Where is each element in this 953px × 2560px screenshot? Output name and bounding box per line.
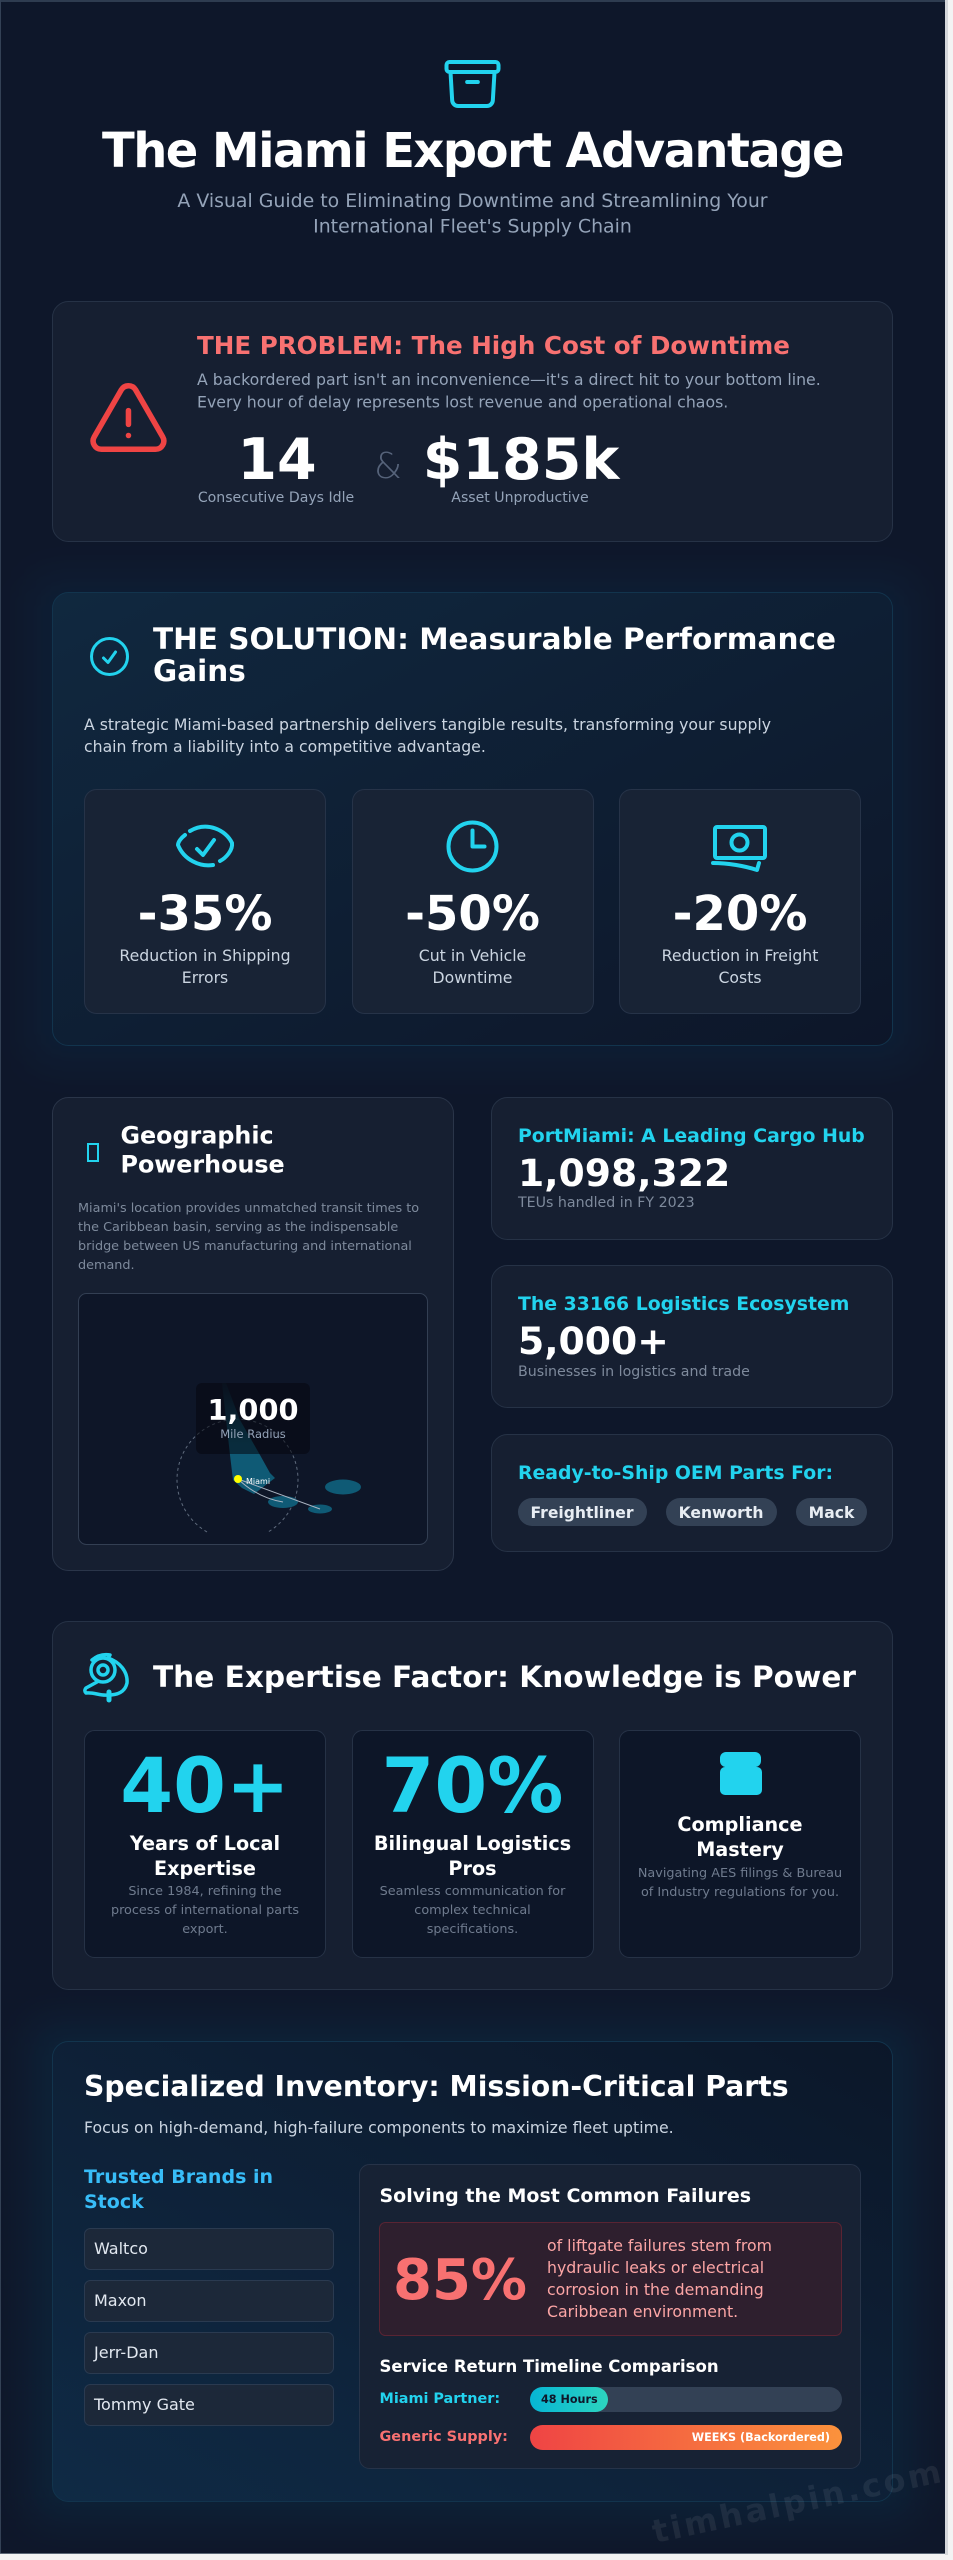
map: caribbean reach (78, 1294, 428, 1544)
problem description: A backordered part isn't an inconvenience—it's a direct hit to your bottom line. (197, 370, 821, 389)
stat: 185k: $185k (423, 427, 620, 493)
timeline comparison (380, 2357, 842, 2450)
card: shipping errors: -35% (138, 886, 272, 942)
shipping routes (238, 1479, 320, 1509)
card: bilingual pros: Seamless communication for (380, 1884, 566, 1899)
card: years of expertise: Since 1984, refining the (128, 1884, 282, 1899)
stat card: 33166 ecosystem: 5,000+ (518, 1319, 669, 1363)
solution heading: THE SOLUTION: Measurable Performance (153, 622, 836, 656)
card: shipping errors: Reduction in Shipping (119, 946, 291, 965)
miami marker: Miami (246, 1477, 270, 1486)
card: vehicle downtime: Downtime (433, 968, 512, 987)
stat: 14 days (198, 427, 354, 506)
bar: Miami partner (380, 2387, 842, 2412)
geographic description: the Caribbean basin, serving as the indispensable (78, 1220, 398, 1235)
card: freight costs (620, 790, 860, 1014)
geographic heading: Powerhouse (120, 1150, 285, 1178)
icon: expertise gears (85, 1655, 127, 1700)
card: compliance mastery: Navigating AES filings & Bureau (638, 1866, 842, 1881)
card: compliance mastery (620, 1730, 860, 1958)
card: years of expertise: Years of Local (129, 1832, 280, 1855)
card: bilingual pros: Bilingual Logistics (374, 1832, 571, 1855)
card: vehicle downtime: Cut in Vehicle (419, 946, 526, 965)
card: freight costs: Costs (718, 968, 762, 987)
radius circle (177, 1419, 298, 1532)
subtitle: International Fleet's Supply Chain (313, 216, 632, 238)
trusted brands list (84, 2166, 334, 2426)
watermark: timhalpin.com (649, 2452, 947, 2551)
icon: archive box (447, 62, 499, 106)
callout: 85 percent: hydraulic leaks or electrical (547, 2258, 764, 2277)
problem description: Every hour of delay represents lost revenue and operational chaos. (197, 392, 728, 412)
card: years of expertise: export. (182, 1922, 228, 1937)
card: bilingual pros (352, 1730, 594, 1958)
card: freight costs: Reduction in Freight (662, 946, 818, 965)
title: The Miami Export Advantage (102, 123, 843, 179)
brand: Jerr-Dan: Jerr-Dan (93, 2343, 158, 2362)
stat: 14 days: 14 (237, 427, 317, 493)
brand: Jerr-Dan (84, 2332, 334, 2374)
radius callout (196, 1383, 310, 1454)
ampersand: & (374, 446, 402, 487)
trusted brands list: Trusted Brands in (84, 2166, 273, 2188)
stat card: 33166 ecosystem (492, 1266, 892, 1408)
trusted brands list: Stock (84, 2191, 144, 2213)
bar: generic supply (380, 2425, 842, 2450)
panel: the expertise factor (52, 1622, 892, 1990)
icon: compliance badge (720, 1752, 762, 1795)
panel: common failures (360, 2164, 860, 2468)
card: years of expertise: Expertise (154, 1857, 256, 1880)
chip: Freightliner: Freightliner (530, 1504, 634, 1522)
panel: common failures: Solving the Most Common Failures (380, 2185, 751, 2207)
geographic heading: Geographic (120, 1122, 274, 1150)
stat: 14 days: Consecutive Days Idle (198, 490, 354, 506)
panel: specialized inventory (52, 2042, 892, 2502)
stat card: PortMiami: TEUs handled in FY 2023 (517, 1195, 695, 1211)
card: bilingual pros: 70% (382, 1741, 563, 1830)
header (102, 62, 843, 238)
expertise heading: The Expertise Factor: Knowledge is Power (153, 1660, 856, 1694)
card: bilingual pros: complex technical (414, 1903, 531, 1918)
miami marker (234, 1475, 270, 1486)
card: compliance mastery: Mastery (696, 1838, 784, 1861)
stat card: 33166 ecosystem: The 33166 Logistics Ecosystem (518, 1294, 849, 1315)
solution description: chain from a liability into a competitive advantage. (84, 737, 486, 756)
inventory heading: Specialized Inventory: Mission-Critical Parts (84, 2070, 789, 2103)
solution description: A strategic Miami-based partnership delivers tangible results, transforming your supply (84, 715, 771, 734)
card: OEM parts: Ready-to-Ship OEM Parts For: (518, 1463, 833, 1484)
card: shipping errors: Errors (182, 968, 228, 987)
card: years of expertise: process of international parts (111, 1903, 299, 1918)
problem heading: THE PROBLEM: The High Cost of Downtime (197, 331, 790, 360)
bar: generic supply: WEEKS (Backordered) (692, 2431, 830, 2444)
subtitle: A Visual Guide to Eliminating Downtime and Streamlining Your (177, 190, 768, 212)
radius callout: 1,000 (207, 1393, 299, 1427)
inventory description: Focus on high-demand, high-failure components to maximize fleet uptime. (84, 2118, 674, 2137)
chip: Kenworth (666, 1498, 777, 1526)
card: compliance mastery: of Industry regulations for you. (641, 1885, 839, 1900)
brand: Maxon (84, 2280, 334, 2322)
card: bilingual pros: Pros (448, 1857, 497, 1880)
geographic description: demand. (78, 1258, 135, 1273)
brand: Waltco: Waltco (94, 2239, 148, 2258)
panel: the solution (52, 592, 892, 1046)
bar: generic supply: Generic Supply: (380, 2429, 508, 2445)
card: shipping errors (84, 790, 326, 1014)
callout: 85 percent: Caribbean environment. (547, 2302, 738, 2321)
callout: 85 percent (380, 2222, 842, 2336)
brand: Tommy Gate: Tommy Gate (93, 2395, 195, 2414)
timeline comparison: Service Return Timeline Comparison (380, 2357, 719, 2376)
solution heading: Gains (153, 654, 246, 688)
florida landmass (222, 1383, 275, 1494)
chip: Freightliner (518, 1498, 647, 1526)
chip: Mack: Mack (809, 1504, 855, 1522)
bar: Miami partner: Miami Partner: (380, 2391, 500, 2407)
callout: 85 percent: 85% (393, 2248, 527, 2313)
radius callout: Mile Radius (220, 1427, 286, 1441)
panel: the problem (52, 302, 892, 542)
callout: 85 percent: of liftgate failures stem from (547, 2236, 772, 2255)
card: compliance mastery: Compliance (677, 1813, 803, 1836)
bar: Miami partner: 48 Hours (541, 2393, 598, 2406)
icon: warning triangle (93, 386, 164, 449)
card: OEM parts (492, 1434, 892, 1552)
callout: 85 percent: corrosion in the demanding (547, 2280, 764, 2299)
brand: Tommy Gate (84, 2384, 334, 2426)
chip: Kenworth: Kenworth (679, 1504, 763, 1522)
icon: banknote (713, 827, 765, 870)
icon: location glyph (88, 1144, 98, 1161)
geographic description: bridge between US manufacturing and international (78, 1239, 412, 1254)
stat card: PortMiami: PortMiami: A Leading Cargo Hub (518, 1126, 865, 1147)
card: years of expertise (84, 1730, 326, 1958)
stat: 185k: Asset Unproductive (451, 490, 589, 506)
card: freight costs: -20% (673, 886, 807, 942)
islands (268, 1480, 361, 1514)
brand: Maxon: Maxon (94, 2291, 147, 2310)
chip: Mack (796, 1498, 867, 1526)
card: years of expertise: 40+ (120, 1741, 290, 1830)
card: vehicle downtime: -50% (405, 886, 540, 942)
stat card: PortMiami (492, 1098, 892, 1240)
icon: check circle (92, 639, 128, 675)
stat card: 33166 ecosystem: Businesses in logistics and trade (518, 1364, 750, 1380)
icon: clock (449, 823, 497, 871)
icon: eye check (178, 827, 232, 865)
stat card: PortMiami: 1,098,322 (518, 1151, 730, 1195)
card: vehicle downtime (352, 790, 594, 1014)
brand: Waltco (84, 2228, 334, 2270)
geographic description: Miami's location provides unmatched transit times to (78, 1201, 419, 1216)
panel: geographic powerhouse (52, 1098, 454, 1570)
card: bilingual pros: specifications. (427, 1922, 518, 1937)
